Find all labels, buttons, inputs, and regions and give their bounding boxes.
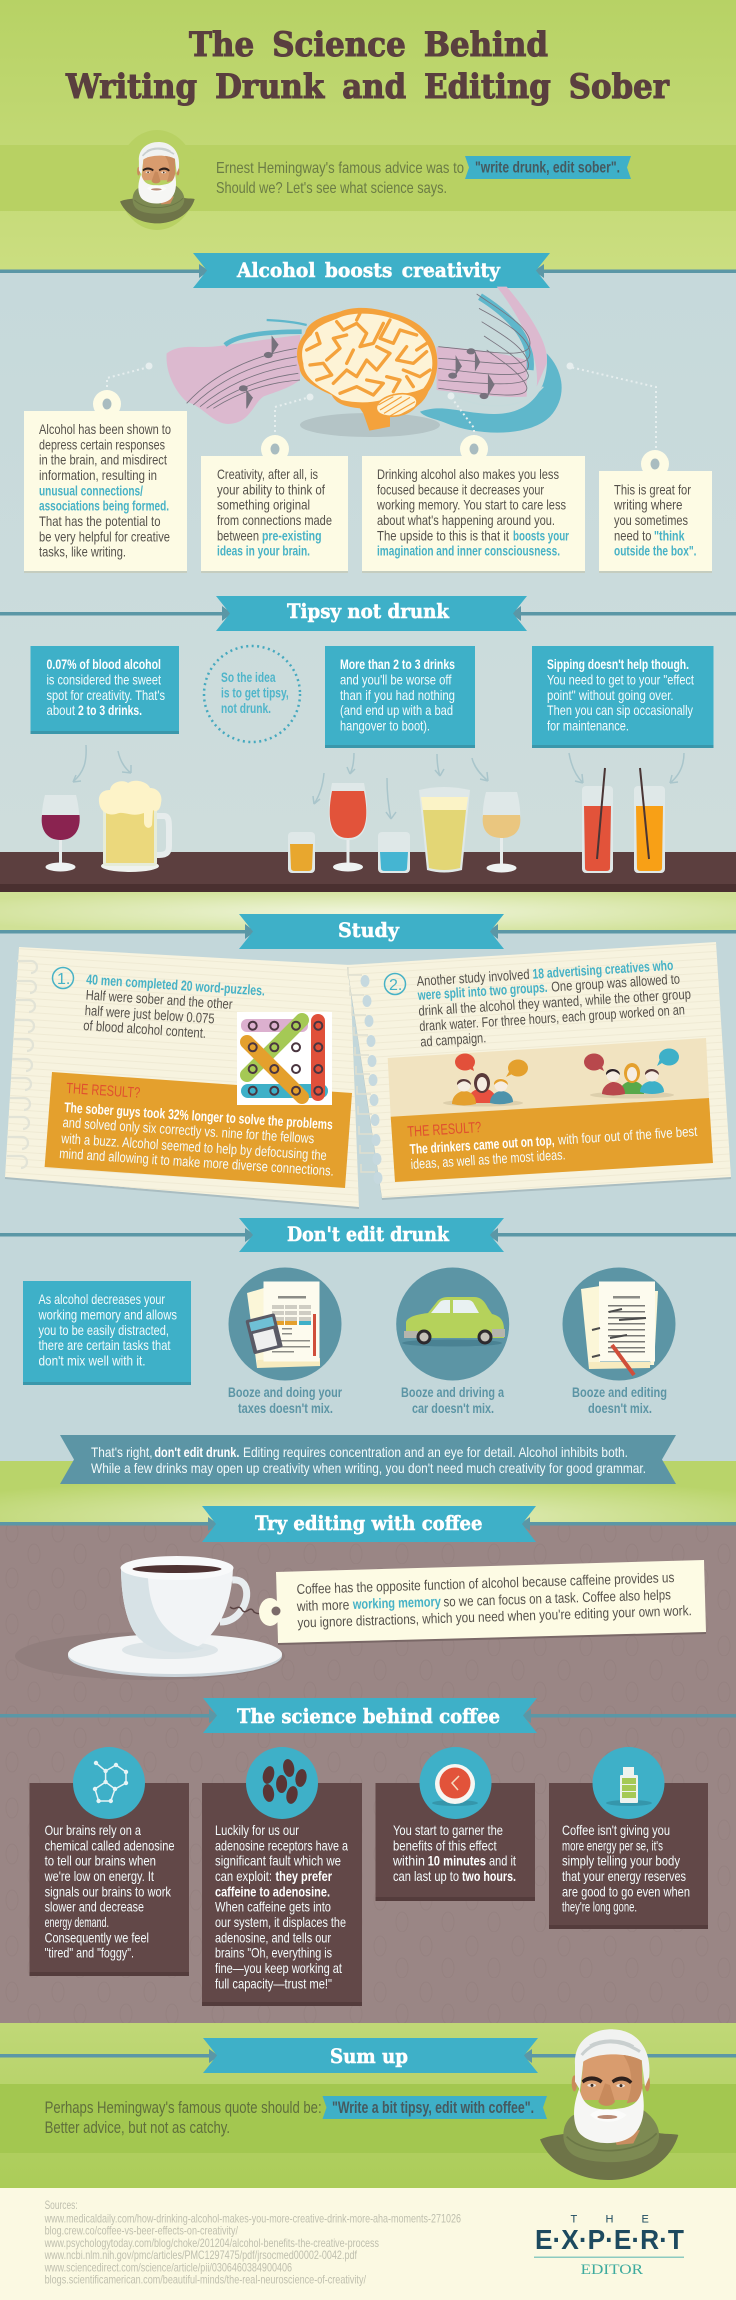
number badge 2: 2. (389, 977, 402, 994)
title: The Science Behind (189, 25, 548, 65)
card: creativity: something original (217, 497, 310, 513)
captions for circles: car doesn't mix. (412, 1400, 494, 1416)
band behind sum up text (0, 2084, 736, 2153)
logo: The Expert Editor: EDITOR (581, 2262, 643, 2278)
panel: adenosine: we're low on energy. It (44, 1868, 154, 1884)
logo: The Expert Editor: H (606, 2214, 614, 2226)
banner: Alcohol boosts creativity (0, 253, 736, 288)
card: alcohol depresses responses: information, resulting in (39, 467, 157, 483)
banner: Tipsy not drunk (0, 596, 736, 631)
callout: coffee tag: Coffee has the opposite function of alcohol because caffeine provides us (296, 1569, 675, 1597)
background: green header (0, 0, 736, 270)
card: think outside the box: writing where (613, 497, 683, 513)
box: more than 2 to 3 drinks: and you'll be worse off (340, 672, 452, 688)
card: creativity: from connections made (217, 512, 332, 528)
panel: caffeine receptors: adenosine receptors have a (215, 1837, 348, 1853)
panel: adenosine: signals our brains to work (45, 1883, 172, 1899)
paper: study two (347, 942, 731, 1200)
illustration: brain with music (167, 287, 562, 437)
card: alcohol depresses responses: tasks, like writing. (39, 544, 126, 560)
captions for circles (228, 1384, 667, 1416)
intro text (216, 156, 631, 197)
box: more than 2 to 3 drinks: than if you had nothing (340, 687, 455, 703)
quote ribbon: "Write a bit tipsy, edit with coffee". (332, 2099, 534, 2117)
panel: caffeine receptors: our system, it displaces the (215, 1914, 346, 1930)
captions for circles: doesn't mix. (588, 1400, 652, 1416)
background: blue study and don't edit section (0, 932, 736, 1462)
drink: orange shot (288, 832, 315, 873)
background: footer (0, 2188, 736, 2300)
sources: www.sciencedirect.com/science/article/pii/0306460384900406 (44, 2260, 292, 2274)
banner: Tipsy not drunk: Tipsy not drunk (287, 600, 449, 623)
paper: study two: Another study involved (416, 966, 530, 989)
box: working memory tasks: working memory and allows (38, 1306, 177, 1322)
panel: caffeine receptors: When caffeine gets into (215, 1899, 331, 1915)
logo: The Expert Editor: E (642, 2214, 649, 2226)
drink: pale wine (483, 792, 520, 872)
box: sweet spot: spot for creativity. That's (46, 687, 165, 703)
bar counter (0, 852, 736, 892)
box: sipping: Sipping doesn't help though. (547, 656, 689, 672)
panel: adenosine (30, 1747, 189, 1976)
logo: The Expert Editor (534, 2214, 684, 2278)
card: creativity: pre-existing (262, 527, 322, 543)
panel: energy reserves: simply telling your body (562, 1853, 680, 1869)
quote ribbon (465, 156, 631, 179)
card: alcohol depresses responses: unusual connections/ (39, 482, 143, 498)
result panel 1: THE RESULT? (66, 1080, 141, 1102)
group of people 2 (584, 1048, 679, 1098)
icon: Hemingway portrait large (540, 2029, 678, 2180)
panel: adenosine: Consequently we feel (45, 1929, 149, 1945)
background: light green strip (0, 892, 736, 932)
intro text: Ernest Hemingway's famous advice was to (216, 160, 464, 177)
box: sweet spot: 2 to 3 drinks. (78, 702, 142, 718)
icon: taxes (228, 1268, 342, 1380)
callout: coffee tag (230, 1560, 706, 1645)
box: sipping: Then you can sip occasionally (547, 702, 693, 718)
logo: The Expert Editor: E·X·P·E·R·T (535, 2224, 684, 2255)
banner: The science behind coffee: The science behind coffee (237, 1705, 500, 1728)
box: more than 2 to 3 drinks: hangover to boot). (340, 718, 430, 734)
title: Writing Drunk and Editing Sober (65, 67, 670, 107)
callout: get tipsy not drunk (204, 646, 300, 742)
icon: car (396, 1268, 509, 1380)
callout: coffee tag: so we can focus on a task. Coffee also helps (443, 1586, 671, 1609)
paper: study one (5, 947, 359, 1209)
box: working memory tasks: you to be easily distracted, (38, 1322, 169, 1338)
drink: tall red with straw (582, 768, 613, 873)
result panel 1: with a buzz. Alcohol seemed to help by defocusing the (60, 1130, 327, 1163)
box: sipping: You need to get to your "effect (547, 672, 694, 688)
background: blue creativity and tipsy section (0, 270, 736, 852)
card: creativity: your ability to think of (217, 481, 325, 497)
sum up text: Perhaps Hemingway's famous quote should be: (45, 2098, 322, 2117)
icon: coffee cup and saucer (15, 1556, 285, 1680)
card: working memory: The upside to this is that it (377, 527, 509, 543)
card: working memory: focused because it decreases your (377, 481, 544, 497)
paper: study two: ad campaign. (420, 1029, 487, 1049)
background: sum up section (0, 2023, 736, 2188)
callout: get tipsy not drunk: So the idea (221, 669, 276, 685)
captions for circles: taxes doesn't mix. (238, 1400, 333, 1416)
paper: study one: of blood alcohol content. (83, 1017, 207, 1041)
box: sweet spot: is considered the sweet (46, 672, 161, 688)
panel: adenosine: energy demand. (45, 1914, 109, 1930)
box: sipping: for maintenance. (547, 718, 629, 734)
panel: caffeine receptors: adenosine, and tells our (215, 1929, 331, 1945)
portrait backdrop: small Hemingway circle (117, 130, 197, 230)
card: alcohol depresses responses: That has the potential to (39, 513, 161, 529)
panel: timing: You start to garner the (393, 1822, 503, 1838)
icon: Hemingway portrait small (120, 142, 195, 223)
box: sweet spot: about (46, 702, 75, 718)
card: think outside the box: "think (654, 527, 685, 543)
box: working memory tasks: there are certain tasks that (38, 1337, 171, 1353)
paper: study two: 18 advertising creatives who (532, 957, 674, 982)
number badge 2 (384, 974, 406, 994)
drink: red wine (42, 795, 80, 872)
icon: word puzzle (237, 1012, 332, 1105)
panel: timing: benefits of this effect (393, 1837, 497, 1853)
ribbon: don't edit drunk statement: Editing requires concentration and an eye for detail. Alcohol inhibits both. (243, 1444, 628, 1460)
banner: Sum up: Sum up (330, 2045, 408, 2068)
box: more than 2 to 3 drinks: More than 2 to 3 drinks (340, 656, 455, 672)
panel: energy reserves: Coffee isn't giving you (562, 1822, 670, 1838)
result panel 1 (45, 1072, 352, 1188)
panel: energy reserves: they're long gone. (562, 1899, 637, 1915)
sources: www.medicaldaily.com/how-drinking-alcohol-makes-you-more-creative-drink-more-aha-moments-271026 (44, 2212, 461, 2226)
captions for circles: Booze and doing your (228, 1384, 342, 1400)
box: working memory tasks: don't mix well with it. (38, 1352, 146, 1368)
number badge 1 (52, 968, 74, 988)
panel: caffeine receptors: can exploit: (215, 1868, 272, 1884)
card: alcohol depresses responses: be very helpful for creative (39, 528, 170, 544)
banner: Alcohol boosts creativity: Alcohol boosts creativity (236, 259, 501, 282)
card: think outside the box: outside the box". (614, 543, 696, 559)
result panel 2: with four out of the five best (557, 1123, 698, 1148)
ribbon: don't edit drunk statement: While a few drinks may open up creativity when writing, you don't need much creativity for good grammar. (91, 1460, 646, 1476)
card: think outside the box (599, 450, 712, 573)
box: working memory tasks: As alcohol decreases your (38, 1291, 165, 1307)
sum up text (45, 2096, 547, 2137)
sources: www.ncbi.nlm.nih.gov/pmc/articles/PMC1297475/pdf/jrsocmed00002-0042.pdf (44, 2248, 357, 2262)
paper: study one: Half were sober and the other (85, 987, 233, 1012)
card: think outside the box: This is great for (614, 481, 691, 497)
panel: adenosine: slower and decrease (45, 1899, 144, 1915)
sources: blog.crew.co/coffee-vs-beer-effects-on-creativity/ (45, 2224, 238, 2238)
card: alcohol depresses responses: in the brain, and misdirect (39, 452, 167, 468)
background: coffee section (0, 1523, 736, 2023)
banner: Don't edit drunk: Don't edit drunk (287, 1223, 449, 1246)
card: alcohol depresses responses (24, 390, 187, 573)
panel: adenosine: Our brains rely on a (45, 1822, 141, 1838)
intro band (0, 145, 736, 211)
card: working memory (362, 435, 585, 573)
banner: The science behind coffee (0, 1698, 736, 1733)
group of people 1 (443, 1054, 528, 1106)
logo: The Expert Editor: T (570, 2214, 578, 2226)
result panel 2: ideas, as well as the most ideas. (410, 1146, 566, 1172)
sources (44, 2198, 461, 2287)
panel: adenosine: to tell our brains when (45, 1853, 156, 1869)
sum up text: Better advice, but not as catchy. (45, 2118, 230, 2137)
number badge 1: 1. (57, 971, 70, 988)
box: sweet spot (30, 646, 179, 734)
card: working memory: boosts your (513, 527, 569, 543)
box: sweet spot: 0.07% of blood alcohol (46, 656, 161, 672)
banner: Don't edit drunk (0, 1218, 736, 1252)
panel: timing: within (392, 1853, 425, 1869)
panel: caffeine receptors: fine—you keep working at (215, 1960, 342, 1976)
icon: battery (592, 1747, 664, 1819)
drink: red cocktail glass (329, 783, 367, 872)
card: working memory: imagination and inner consciousness. (377, 543, 560, 559)
result panel 2: THE RESULT? (407, 1119, 482, 1141)
tan band with groups (388, 1038, 709, 1117)
sources: www.psychologytoday.com/blog/choke/201204/alcohol-benefits-the-creative-process (44, 2236, 379, 2250)
banner: Try editing with coffee (0, 1506, 736, 1542)
card: think outside the box: you sometimes (614, 512, 688, 528)
panel: timing: 10 minutes (428, 1853, 486, 1869)
quote ribbon (322, 2096, 547, 2119)
panel: caffeine receptors: caffeine to adenosine. (215, 1883, 330, 1899)
card: creativity: ideas in your brain. (217, 543, 310, 559)
dotted connectors from cards to illustration (107, 362, 656, 453)
panel: timing: can last up to (393, 1868, 459, 1884)
paper: study two: were split into two groups. (416, 979, 548, 1003)
ribbon: don't edit drunk statement (60, 1435, 676, 1484)
panel: adenosine: "tired" and "foggy". (45, 1945, 134, 1961)
card: alcohol depresses responses: depress certain responses (39, 436, 165, 452)
result panel 1: The sober guys took 32% longer to solve the problems (64, 1099, 333, 1132)
result panel 2 (391, 1098, 713, 1182)
banner: Sum up (0, 2038, 736, 2073)
quote ribbon: "write drunk, edit sober". (475, 160, 620, 176)
icon: molecule (73, 1747, 145, 1819)
panel: energy reserves: that your energy reserves (562, 1868, 686, 1884)
panel: caffeine receptors (202, 1747, 362, 2006)
captions for circles: Booze and editing (572, 1384, 667, 1400)
paper: study one: 40 men completed 20 word-puzzles. (86, 971, 265, 999)
panel: caffeine receptors: brains "Oh, everything is (215, 1945, 332, 1961)
panel: caffeine receptors: Luckily for us our (215, 1822, 299, 1838)
paper: study one: half were just below 0.075 (84, 1002, 215, 1026)
icon: edited pages (562, 1268, 676, 1380)
sources: Sources: (45, 2198, 78, 2212)
callout: coffee tag: with more (296, 1596, 350, 1614)
result panel 1: and solved only six correctly vs. nine for the fellows (62, 1114, 315, 1146)
card: alcohol depresses responses: Alcohol has been shown to (39, 421, 171, 437)
panel: timing: two hours. (462, 1868, 516, 1884)
panel: caffeine receptors: full capacity—trust me!" (215, 1975, 332, 1991)
callout: coffee tag: working memory (352, 1593, 441, 1612)
ribbon: don't edit drunk statement: don't edit drunk. (154, 1444, 239, 1460)
box: more than 2 to 3 drinks: (and end up with a bad (340, 702, 453, 718)
drink: pint (419, 787, 470, 872)
card: think outside the box: need to (614, 527, 652, 543)
banner: Study: Study (338, 919, 400, 942)
icon: coffee beans (246, 1747, 318, 1819)
box: sipping: point" without going over. (547, 687, 674, 703)
box: more than 2 to 3 drinks (325, 646, 475, 748)
background: green strip below don't edit (0, 1461, 736, 1523)
ribbon: don't edit drunk statement: That's right, (91, 1444, 152, 1460)
panel: energy reserves: more energy per se, it's (562, 1837, 663, 1853)
icon: clock (420, 1747, 492, 1819)
captions for circles: Booze and driving a (401, 1384, 504, 1400)
panel: caffeine receptors: they prefer (276, 1868, 332, 1884)
box: sipping (532, 646, 714, 748)
card: working memory: about what's happening around you. (377, 512, 555, 528)
title (65, 25, 670, 107)
card: working memory: Drinking alcohol also makes you less (377, 466, 559, 482)
box: working memory tasks (23, 1281, 191, 1385)
banner: Try editing with coffee: Try editing with coffee (255, 1512, 482, 1535)
drink: blue shot (378, 832, 410, 873)
card: creativity (201, 435, 348, 573)
drink: tall orange with straw (634, 768, 665, 873)
card: alcohol depresses responses: associations being formed. (39, 498, 169, 514)
drink: beer mug (99, 781, 169, 872)
card: creativity: between (217, 527, 259, 543)
callout: get tipsy not drunk: is to get tipsy, (221, 684, 289, 700)
panel: caffeine receptors: significant fault which we (215, 1853, 341, 1869)
banner: Study (0, 914, 736, 949)
paper: study two: One group was allowed to (551, 971, 681, 995)
sources: blogs.scientificamerican.com/beautiful-minds/the-real-neuroscience-of-creativity/ (45, 2273, 366, 2287)
panel: timing: and it (489, 1853, 516, 1869)
callout: get tipsy not drunk: not drunk. (221, 700, 271, 716)
panel: timing (376, 1747, 535, 1901)
intro text: Should we? Let's see what science says. (216, 180, 447, 197)
card: creativity: Creativity, after all, is (217, 466, 318, 482)
panel: energy reserves (549, 1747, 708, 1929)
arrows to drinks (73, 745, 684, 819)
result panel 2: The drinkers came out on top, (409, 1132, 555, 1157)
panel: energy reserves: are good to go even when (562, 1883, 690, 1899)
result panel 1: mind and allowing it to make more diverse connections. (59, 1145, 334, 1179)
card: working memory: working memory. You start to care less (376, 497, 566, 513)
panel: adenosine: chemical called adenosine (45, 1837, 175, 1853)
